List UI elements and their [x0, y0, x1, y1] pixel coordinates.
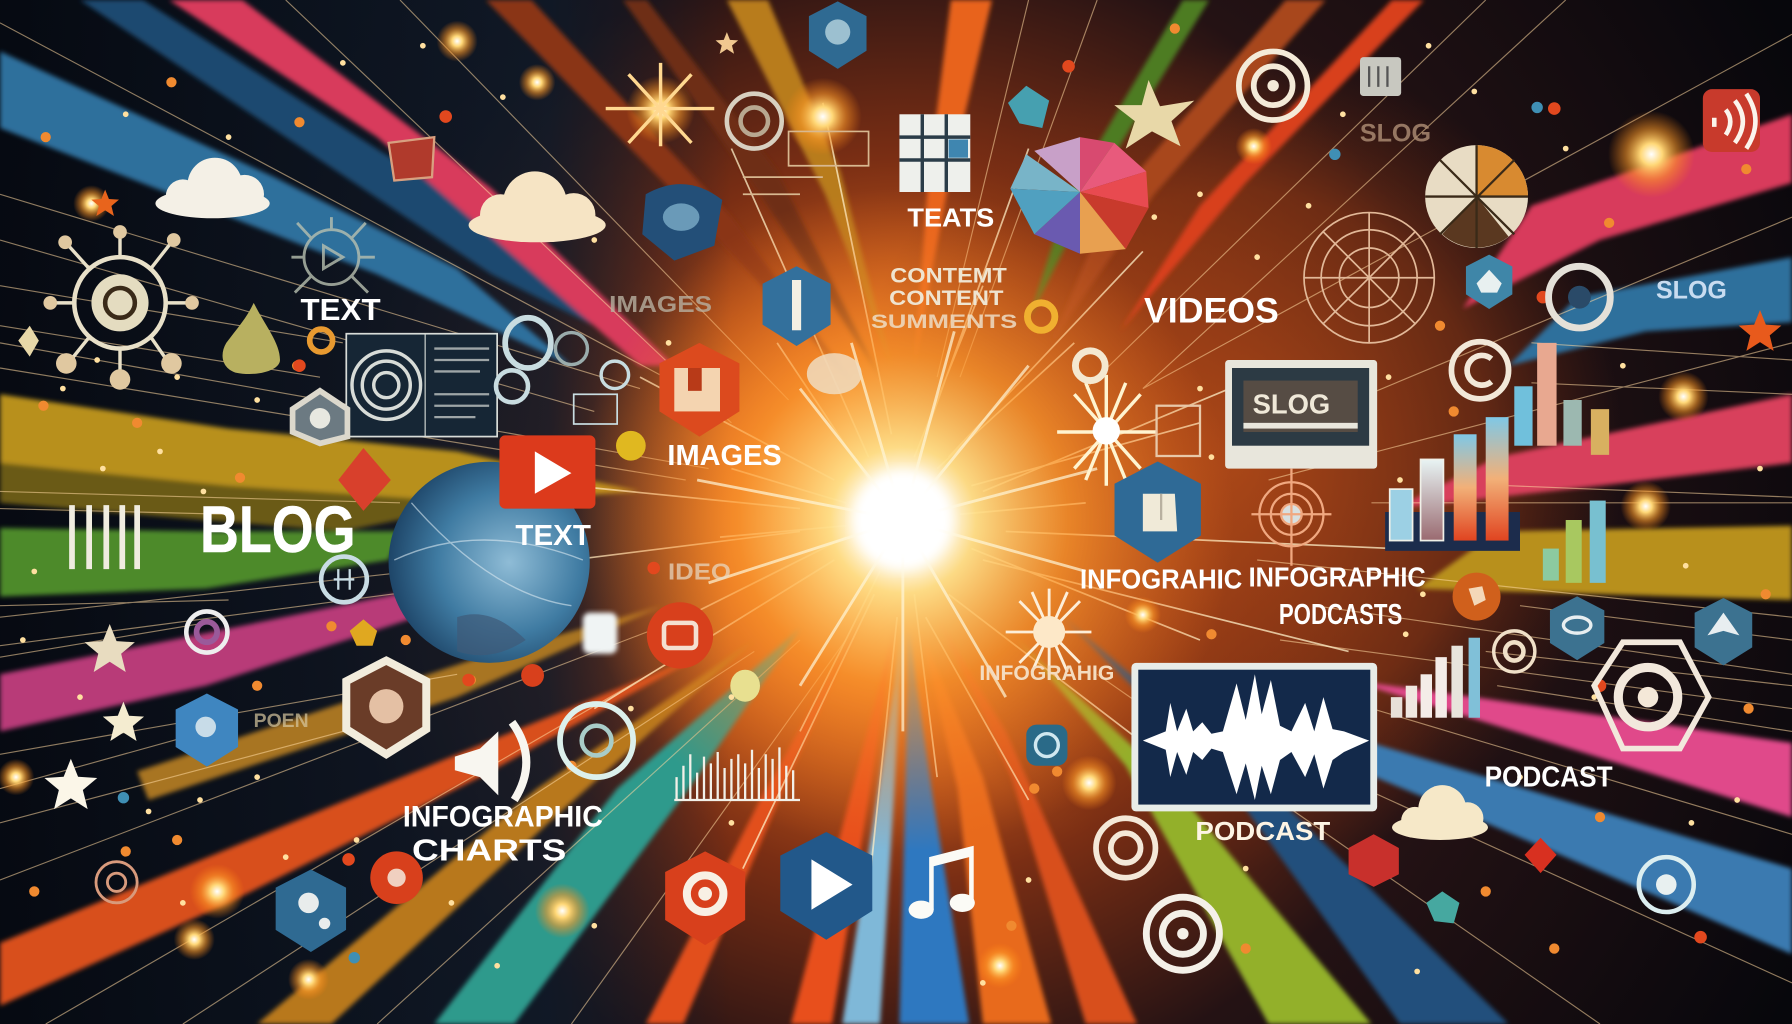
central light burst	[571, 189, 1234, 851]
icon: cream star	[103, 702, 144, 741]
icon: outlined hexagon	[346, 661, 426, 754]
icon: pinwheel	[1010, 137, 1149, 254]
icon: red circle badge	[647, 602, 713, 669]
icon: music note	[909, 846, 975, 919]
icon: yellow ring	[1027, 303, 1055, 330]
icon: target rings cluster	[496, 318, 629, 424]
label: infographic infographic podcasts: INFOGRAPHIC	[1249, 561, 1426, 592]
icon: blue hexagon shield	[1115, 461, 1201, 563]
chart: small waveform	[674, 747, 800, 800]
icon: red bubble	[370, 851, 423, 904]
icon: blue hexagon pair	[1550, 596, 1752, 665]
icon: ring bottom right	[1639, 857, 1694, 912]
icon: shell	[807, 353, 862, 394]
label: infographic charts: INFOGRAPHIC	[403, 800, 603, 833]
icon: droplet	[223, 303, 280, 374]
icon: cloud left	[155, 158, 270, 218]
icon: beach ball	[1425, 145, 1528, 248]
icon: headset ring	[560, 704, 633, 777]
icon: blue orb	[642, 184, 722, 261]
icon: burst top	[606, 63, 714, 146]
icon: outlined target hexagon	[1594, 642, 1709, 749]
icon: spiral bottom	[1096, 818, 1155, 878]
chart: podcast waveform monitor	[1131, 663, 1377, 811]
label: infographic infographic podcasts	[1080, 561, 1426, 631]
icon: globe	[389, 462, 590, 663]
icon: pale star	[85, 624, 135, 672]
icon: monitor slog	[1225, 360, 1377, 469]
icon: cream flower	[1114, 80, 1194, 149]
label: podcast: PODCAST	[1195, 816, 1330, 846]
icon: ring under blog	[321, 557, 367, 602]
icon: table sketch	[743, 131, 869, 194]
label: infographic charts: CHARTS	[412, 833, 566, 868]
icon: target top	[1239, 51, 1307, 120]
icon: copyright ring	[1451, 342, 1509, 399]
label: infographic infographic podcasts: INFOGRAHIC	[1080, 564, 1242, 595]
icon: target small	[186, 611, 227, 653]
icon: network hub	[43, 225, 199, 390]
icon: starburst	[1057, 375, 1157, 486]
icon: document sketch	[1157, 406, 1200, 456]
icon: blue hexagon right	[1466, 255, 1512, 309]
label: text on globe: TEXT	[515, 520, 591, 552]
icon: red video play	[499, 435, 595, 509]
icon: ring top	[727, 94, 782, 149]
chart: tall bars top right	[1514, 343, 1609, 455]
icon: eye ring	[1549, 266, 1610, 328]
icon: target ring right	[1494, 631, 1535, 672]
icon: blue hexagon with bar	[763, 266, 831, 346]
label: text: TEXT	[301, 292, 381, 327]
icon: yellow pebble	[730, 670, 760, 702]
icon: starburst lower	[1006, 589, 1091, 674]
icon: white shield ring	[293, 391, 347, 443]
icon: wifi card	[1703, 89, 1760, 152]
icon: barcode bars	[72, 505, 137, 569]
label: infographic faded: INFOGRAHIG	[979, 660, 1114, 685]
icon: red diamond	[338, 448, 391, 511]
label: infographic charts	[403, 800, 603, 868]
icon: cloud right	[1392, 785, 1488, 840]
icon: red hexagon floppy	[659, 343, 739, 437]
icon: target bottom	[1146, 897, 1219, 970]
icon: red note top	[389, 137, 434, 181]
icon: diamond sparkle	[18, 326, 39, 357]
label: poem faded: POEN	[254, 710, 309, 732]
label: content summents: SUMMENTS	[871, 311, 1017, 333]
icon: small orange star top left	[91, 190, 119, 216]
icon: blue hexagon left	[176, 693, 238, 767]
icon: network top	[291, 217, 375, 293]
icon: spiral	[96, 862, 137, 903]
icon: speaker	[455, 722, 526, 800]
icon: grid table	[899, 114, 970, 192]
label: videos faded: IDEO	[668, 558, 731, 584]
panel: spiral document	[346, 334, 497, 437]
label: images: IMAGES	[667, 440, 782, 472]
icon: red hexagon bottom	[665, 851, 745, 945]
label: blog: BLOG	[200, 493, 355, 567]
icon: white star	[44, 759, 97, 809]
label: infographic infographic podcasts: PODCASTS	[1279, 599, 1402, 631]
icon: red badge small	[521, 664, 544, 687]
icon: spiral tile	[1026, 725, 1067, 766]
icon: cloud centre	[469, 171, 606, 242]
icon: yellow badge	[616, 431, 646, 461]
icon: teal gem	[1008, 86, 1049, 128]
icon: grey box	[1360, 57, 1401, 96]
icon: radar web	[1304, 213, 1434, 343]
icon: teal gem bottom	[1426, 891, 1459, 923]
icon: glowing white tile	[583, 613, 617, 654]
icon: reticle	[1251, 469, 1331, 566]
icon: small orange ring	[310, 329, 333, 352]
label: videos: VIDEOS	[1144, 290, 1279, 330]
icon: orange badge	[1453, 573, 1501, 621]
icon: small star top	[716, 32, 738, 54]
chart: pastel bars	[1543, 501, 1606, 583]
label: images faded: IMAGES	[609, 291, 712, 317]
label: content summents: CONTEMT	[890, 262, 1008, 287]
chart: small white bars	[1391, 638, 1480, 718]
icon: red diamond small	[1525, 838, 1557, 873]
icon: blue play hexagon	[780, 832, 872, 940]
label: slog right: SLOG	[1656, 276, 1727, 304]
icon: monitor slog: SLOG	[1253, 389, 1330, 420]
chart: orange gradient bars	[1385, 417, 1520, 551]
label: content summents	[871, 262, 1017, 333]
label: podcast right: PODCAST	[1485, 761, 1613, 793]
icon: red cube	[1349, 834, 1399, 887]
icon: ring small	[1075, 351, 1105, 381]
icon: blue hexagon top	[809, 1, 867, 69]
label: slog top: SLOG	[1360, 120, 1431, 148]
icon: orange star	[1739, 310, 1781, 351]
icon: yellow tag	[350, 619, 377, 646]
label: content summents: CONTENT	[889, 285, 1004, 310]
icon: blue hexagon bottom left	[276, 869, 346, 952]
label: teats: TEATS	[907, 202, 994, 232]
